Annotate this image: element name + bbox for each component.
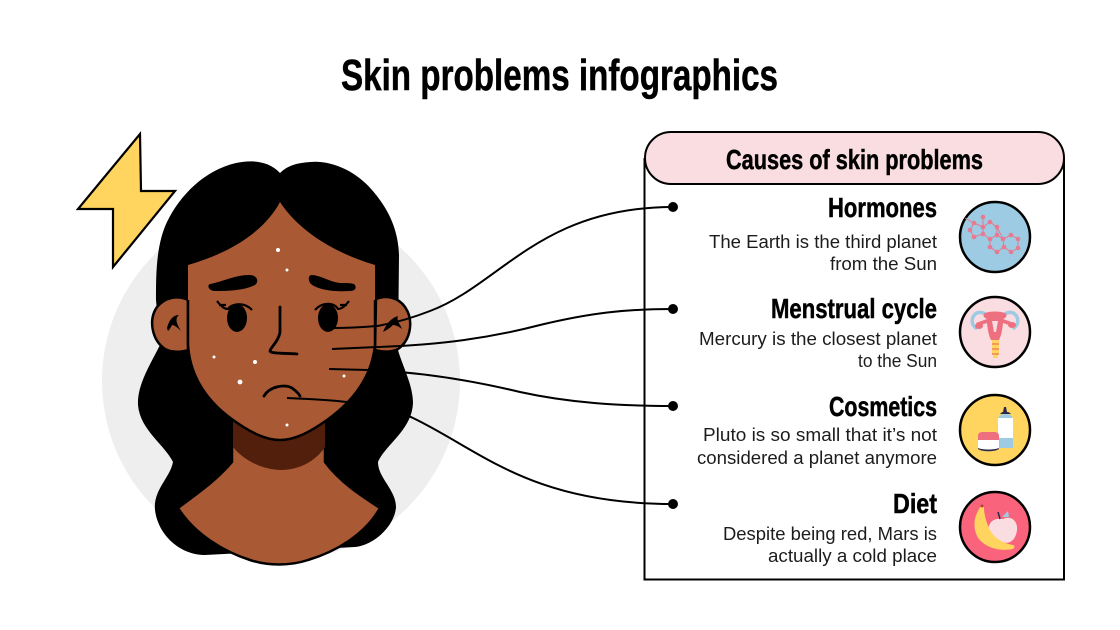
title: Skin problems infographics bbox=[341, 51, 778, 100]
item: hormones: The Earth is the third planet bbox=[709, 232, 937, 252]
ear detail right bbox=[383, 316, 402, 332]
icon: molecule bbox=[960, 202, 1030, 272]
item: menstrual cycle: Menstrual cycle bbox=[771, 293, 937, 324]
item: cosmetics: Pluto is so small that it’s not bbox=[703, 425, 937, 445]
icon: apple and banana bbox=[960, 492, 1030, 562]
ear left bbox=[152, 297, 188, 352]
item: diet: Despite being red, Mars is bbox=[723, 524, 937, 544]
neck shadow bbox=[233, 418, 325, 470]
eyelash right bbox=[315, 301, 349, 310]
eyebrow right bbox=[309, 275, 356, 291]
connector lines bbox=[287, 202, 678, 509]
eye left bbox=[227, 304, 247, 332]
woman illustration bbox=[138, 161, 413, 564]
ear detail left bbox=[167, 315, 181, 331]
item: cosmetics bbox=[697, 391, 937, 468]
panel: causes of skin problems bbox=[644, 132, 1064, 580]
line to cosmetics bbox=[329, 369, 678, 411]
item: diet: actually a cold place bbox=[768, 546, 937, 566]
panel body bbox=[644, 158, 1064, 580]
ear right bbox=[375, 297, 410, 352]
line to hormones bbox=[333, 202, 678, 328]
icon: cosmetics bottles bbox=[960, 395, 1030, 465]
eyebrow left bbox=[208, 275, 257, 291]
item: hormones: Hormones bbox=[828, 192, 937, 223]
pimples bbox=[212, 248, 346, 426]
background circle bbox=[102, 202, 460, 560]
line to diet bbox=[287, 398, 678, 509]
item: cosmetics: Cosmetics bbox=[829, 391, 937, 422]
mouth bbox=[264, 386, 300, 396]
icon: lightning bolt bbox=[78, 134, 175, 267]
item: menstrual cycle: Mercury is the closest planet bbox=[699, 329, 937, 349]
item: diet: Diet bbox=[893, 488, 937, 519]
neck and shoulders bbox=[178, 415, 380, 564]
item: menstrual cycle: to the Sun bbox=[858, 351, 937, 371]
panel header bbox=[645, 132, 1064, 184]
item: diet bbox=[723, 488, 937, 566]
panel heading: Causes of skin problems bbox=[726, 144, 983, 175]
face outline bbox=[188, 300, 375, 440]
item: menstrual cycle bbox=[699, 293, 937, 371]
hair bbox=[138, 161, 413, 555]
eye right bbox=[318, 304, 338, 332]
item: hormones bbox=[709, 192, 937, 274]
line to menstrual cycle bbox=[332, 304, 678, 349]
item: hormones: from the Sun bbox=[830, 254, 937, 274]
item: cosmetics: considered a planet anymore bbox=[697, 448, 937, 468]
icon: uterus bbox=[960, 297, 1030, 367]
eyelash left bbox=[217, 301, 252, 310]
nose bbox=[270, 307, 297, 354]
face bbox=[188, 202, 375, 440]
